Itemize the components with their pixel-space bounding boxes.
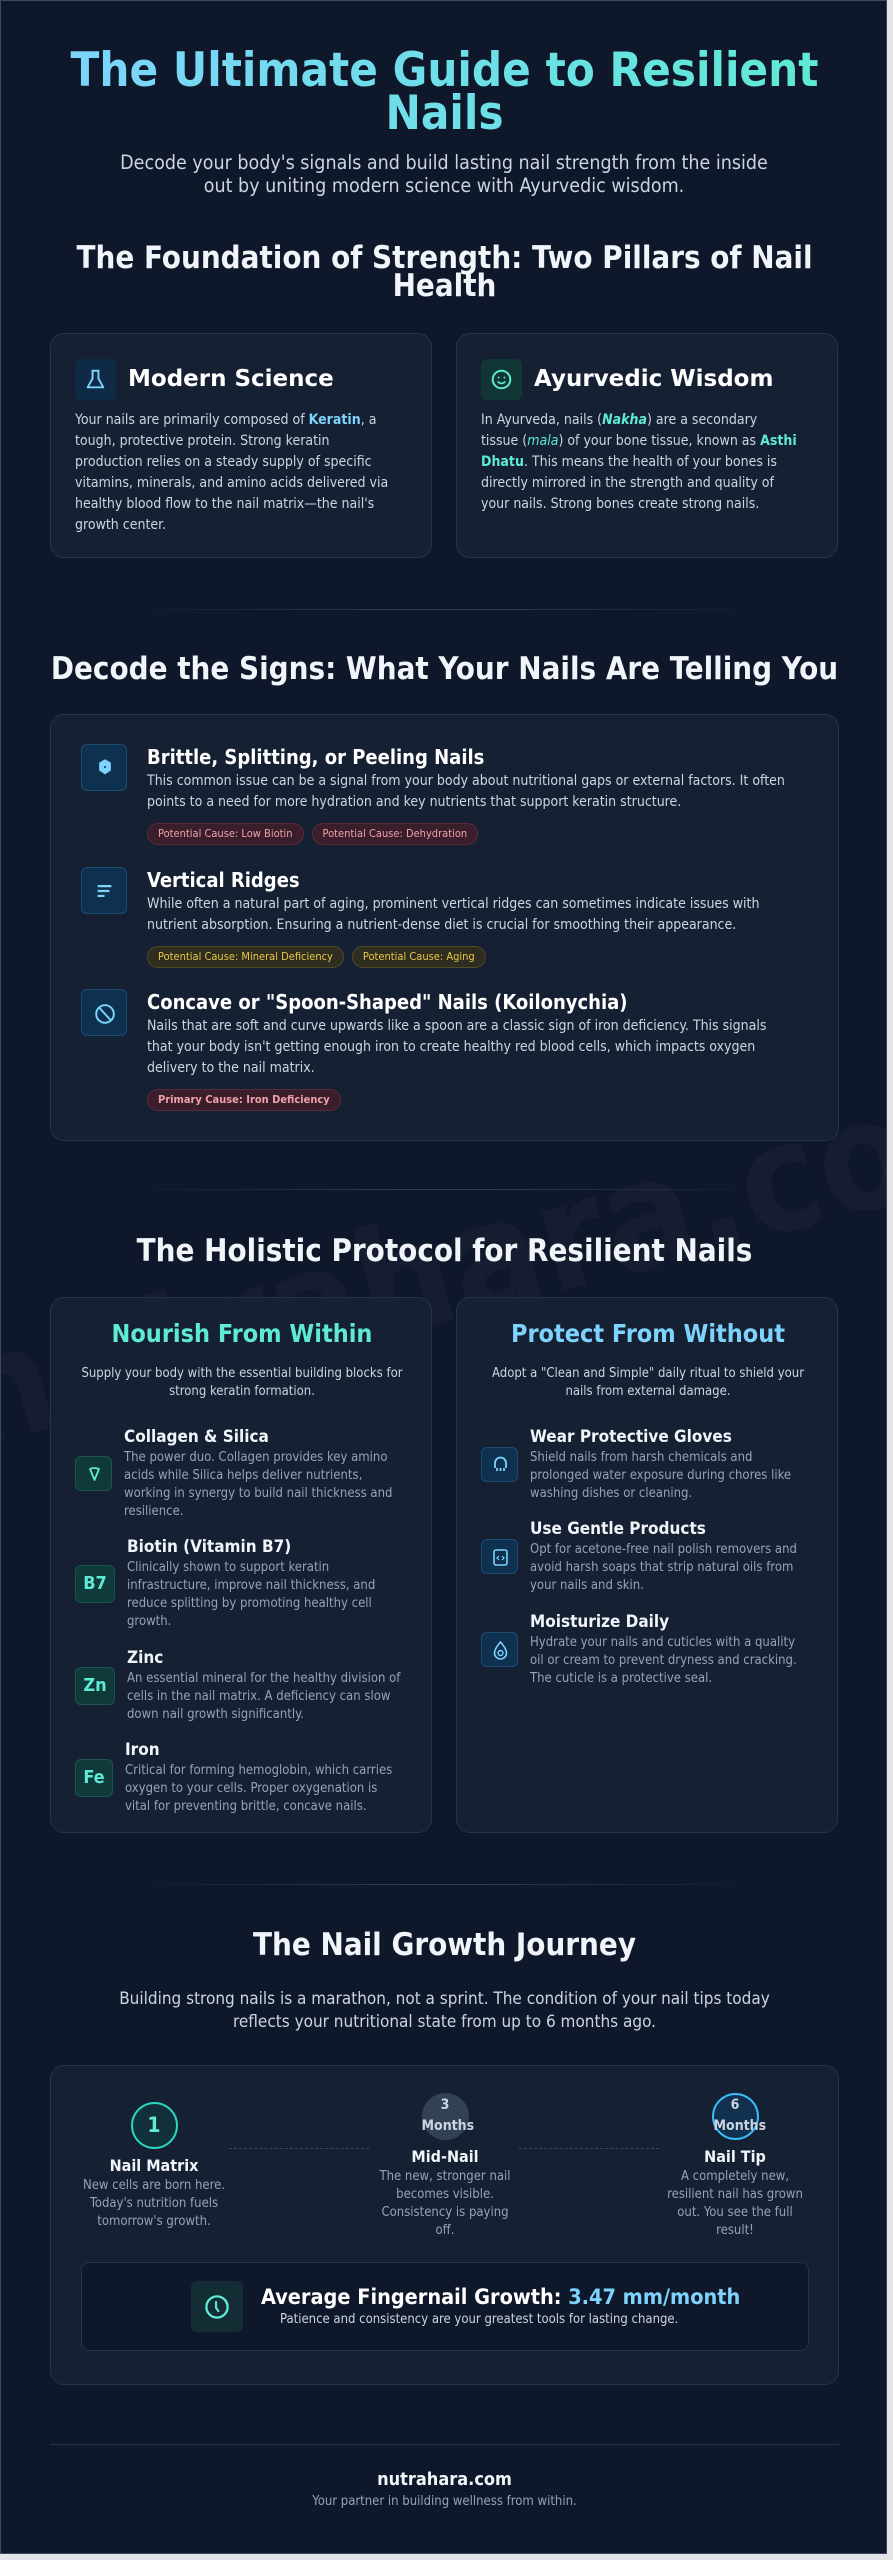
icon: Zn — [75, 1666, 115, 1704]
step: nail tip: Nail Tip — [704, 2147, 766, 2166]
heading: nourish: Nourish From Within — [112, 1319, 372, 1348]
icon: clock — [191, 2281, 243, 2332]
text: ayurvedic: Dhatu. This means the health of your bones is directly mirrored in the strength and quality of your nails. Strong bones create strong nails. — [481, 454, 777, 512]
sign: brittle: Potential Cause: Dehydration — [323, 827, 467, 840]
footer: nutrahara.com — [377, 2469, 512, 2490]
item: gloves — [481, 1427, 791, 1501]
icon: B7: B7 — [83, 1572, 107, 1594]
heading: protect: Protect From Without — [511, 1319, 785, 1348]
panel: protect from without — [456, 1297, 838, 1833]
item: zinc: An essential mineral for the healthy division of cells in the nail matrix. A deficiency can slow down nail growth significantly. — [127, 1671, 400, 1722]
item: collagen — [75, 1427, 392, 1519]
panel: modern science — [50, 333, 432, 558]
text: journey intro: Building strong nails is a marathon, not a sprint. The condition of your nail tips today reflects your nutritional state from up to 6 months ago. — [119, 1989, 770, 2032]
subtitle: Decode your body's signals and build lasting nail strength from the inside out by uniting modern science with Ayurvedic wisdom. — [120, 151, 768, 197]
item: gentle products — [481, 1519, 797, 1593]
icon: shield — [81, 744, 127, 791]
item: gentle products: Opt for acetone-free nail polish removers and avoid harsh soaps that strip natural oils from your nails and skin. — [530, 1542, 797, 1593]
panel: nourish from within — [50, 1297, 432, 1833]
item: zinc: Zinc — [127, 1648, 163, 1668]
icon: ban — [81, 989, 127, 1036]
step: nail matrix — [83, 2102, 225, 2229]
sign: ridges: Potential Cause: Mineral Deficiency — [158, 950, 333, 963]
item: moisturize: Moisturize Daily — [530, 1612, 669, 1632]
sign: koilonychia: Primary Cause: Iron Deficiency — [158, 1093, 330, 1106]
item: moisturize: Hydrate your nails and cuticles with a quality oil or cream to prevent dryness and cracking. The cuticle is a protective seal. — [530, 1635, 797, 1686]
footer: Your partner in building wellness from within. — [312, 2494, 577, 2509]
icon: Fe: Fe — [83, 1766, 105, 1788]
callout: average growth: Patience and consistency are your greatest tools for lasting change. — [280, 2312, 678, 2327]
step: nail tip: 6 — [731, 2097, 739, 2113]
text: ayurvedic: tissue (mala) of your bone tissue, known as Asthi — [481, 433, 797, 449]
sign: ridges: While often a natural part of aging, prominent vertical ridges can sometimes indicate issues with nutrient absorption. Ensuring a nutrient-dense diet is crucial for smoothing their appearance. — [147, 896, 759, 933]
connector lines — [229, 2148, 369, 2149]
step: nail matrix: New cells are born here. Today's nutrition fuels tomorrow's growth. — [83, 2178, 225, 2229]
step: mid-nail — [379, 2093, 511, 2238]
icon: B7 — [75, 1564, 115, 1602]
step: mid-nail: 3 — [441, 2097, 449, 2113]
sign: ridges: Potential Cause: Aging — [363, 950, 475, 963]
icon: Fe — [75, 1758, 113, 1796]
icon: smile — [481, 359, 522, 400]
heading: nail growth journey: The Nail Growth Journey — [253, 1927, 636, 1963]
panel: signs — [50, 714, 839, 1141]
heading: modern science: Modern Science — [128, 366, 334, 392]
sign: brittle: Potential Cause: Low Biotin — [158, 827, 293, 840]
step: nail matrix: 1 — [147, 2113, 161, 2137]
step: nail matrix: Nail Matrix — [110, 2156, 198, 2175]
sign: koilonychia: Nails that are soft and curve upwards like a spoon are a classic sign of iron deficiency. This signals that your body isn't getting enough iron to create healthy red blood cells, which impacts oxygen delivery to the nail matrix. — [147, 1018, 766, 1076]
step: mid-nail: The new, stronger nail becomes visible. Consistency is paying off. — [379, 2169, 511, 2238]
heading: ayurvedic wisdom: Ayurvedic Wisdom — [534, 366, 773, 392]
heading: decode the signs: Decode the Signs: What Your Nails Are Telling You — [51, 651, 838, 687]
text: nourish intro: Supply your body with the essential building blocks for strong keratin formation. — [81, 1366, 403, 1399]
sign: brittle: Brittle, Splitting, or Peeling Nails — [147, 745, 484, 769]
text: modern science: Your nails are primarily composed of Keratin, a tough, protective protein. Strong keratin production relies on a steady supply of specific vitamins, minerals, and amino acids delivered via healthy blood flow to the nail matrix—the nail's growth center. — [75, 412, 388, 533]
panel: ayurvedic wisdom — [456, 333, 838, 558]
sign: koilonychia — [81, 989, 766, 1111]
text: ayurvedic — [481, 412, 797, 512]
item: moisturize — [481, 1612, 797, 1686]
item: collagen: The power duo. Collagen provides key amino acids while Silica helps deliver nutrients, working in synergy to build nail thickness and resilience. — [124, 1450, 392, 1519]
icon: bottle — [481, 1539, 518, 1574]
item: iron: Iron — [125, 1740, 160, 1760]
item: gentle products: Use Gentle Products — [530, 1519, 706, 1539]
step: mid-nail: Mid-Nail — [411, 2147, 479, 2166]
step: nail tip: A completely new, resilient nail has grown out. You see the full result! — [667, 2169, 803, 2238]
text: ayurvedic: In Ayurveda, nails (Nakha) are a secondary — [481, 412, 757, 428]
sign: brittle: This common issue can be a signal from your body about nutritional gaps or external factors. It often points to a need for more hydration and key nutrients that support keratin structure. — [147, 773, 785, 810]
icon: flask — [75, 359, 116, 400]
callout: average growth: Average Fingernail Growth: 3.47 mm/month — [261, 2285, 740, 2310]
text: protect intro: Adopt a "Clean and Simple" daily ritual to shield your nails from external damage. — [492, 1366, 804, 1399]
sign: ridges — [81, 867, 759, 968]
panel: timeline — [50, 2065, 839, 2385]
icon: droplet — [481, 1632, 518, 1667]
item: biotin: Clinically shown to support keratin infrastructure, improve nail thickness, and reduce splitting by promoting healthy cell growth. — [127, 1560, 375, 1629]
item: iron — [75, 1740, 392, 1814]
title: The Ultimate Guide to Resilient Nails — [71, 43, 818, 141]
heading: foundation: The Foundation of Strength: Two Pillars of Nail Health — [76, 240, 813, 304]
item: biotin — [75, 1537, 375, 1629]
heading: holistic protocol: The Holistic Protocol for Resilient Nails — [137, 1233, 752, 1269]
sign: koilonychia: Concave or "Spoon-Shaped" Nails (Koilonychia) — [147, 990, 628, 1014]
item: collagen: Collagen & Silica — [124, 1427, 269, 1447]
step: nail tip: Months — [714, 2118, 766, 2134]
icon: Zn: Zn — [83, 1674, 107, 1696]
step: nail tip — [667, 2093, 803, 2238]
callout: average growth — [81, 2262, 809, 2351]
footer — [312, 2469, 577, 2509]
icon: drop — [75, 1456, 112, 1491]
item: gloves: Shield nails from harsh chemicals and prolonged water exposure during chores like washing dishes or cleaning. — [530, 1450, 791, 1501]
sign: ridges: Vertical Ridges — [147, 868, 300, 892]
icon: lines — [81, 867, 127, 914]
item: iron: Critical for forming hemoglobin, which carries oxygen to your cells. Proper oxygenation is vital for preventing brittle, concave nails. — [125, 1763, 392, 1814]
item: zinc — [75, 1648, 401, 1722]
item: biotin: Biotin (Vitamin B7) — [127, 1537, 291, 1557]
icon: glove — [481, 1447, 518, 1482]
item: gloves: Wear Protective Gloves — [530, 1427, 732, 1447]
sign: brittle — [81, 744, 785, 845]
step: mid-nail: Months — [422, 2118, 474, 2134]
